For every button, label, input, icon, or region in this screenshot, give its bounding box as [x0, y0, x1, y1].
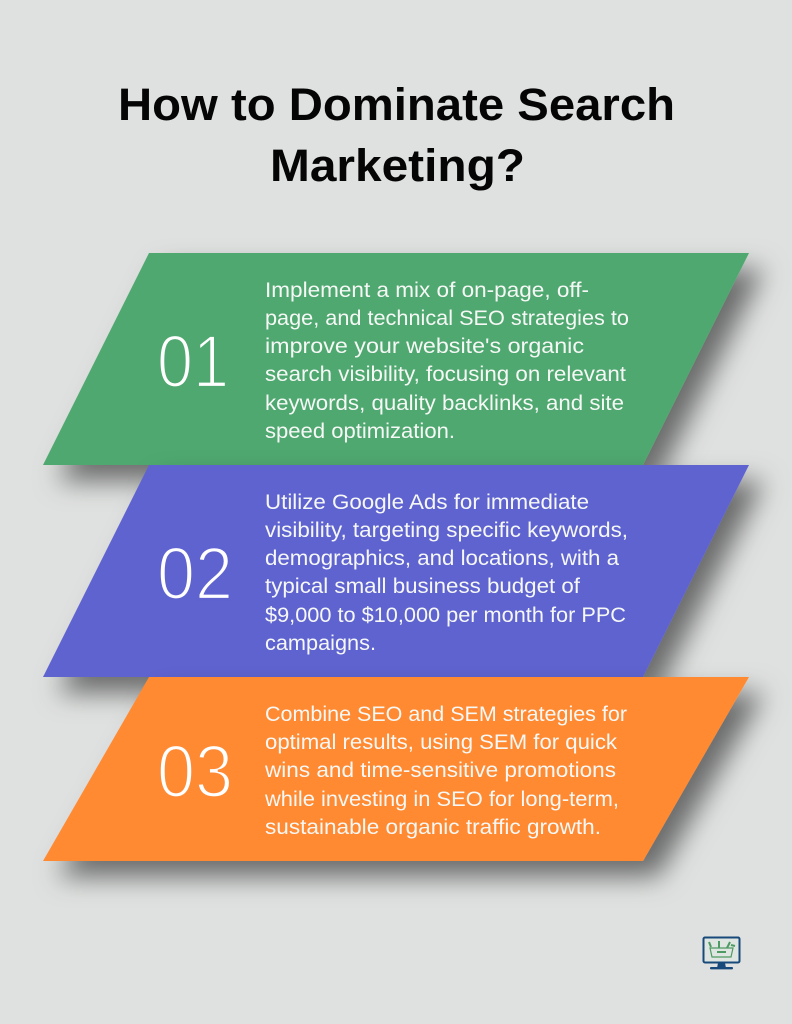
parallelogram: green — [43, 253, 749, 465]
text: step 01 description: Implement a mix of on-page, off- — [265, 279, 589, 302]
text: step 01 description: search visibility, focusing on relevant — [265, 363, 626, 386]
text: step 02 description: $9,000 to $10,000 per month for PPC — [265, 604, 626, 627]
text: step 03 description: optimal results, using SEM for quick — [265, 731, 618, 754]
text: step 02 description: demographics, and locations, with a — [265, 547, 619, 570]
title: Marketing? — [270, 140, 525, 191]
panel: step 01 — [43, 253, 749, 465]
text: step 01 description: page, and technical SEO strategies to — [265, 307, 629, 330]
icon: monitor with toolbox — [704, 938, 740, 969]
text: step 02 description: Utilize Google Ads for immediate — [265, 491, 589, 514]
text: step 03 description: Combine SEO and SEM strategies for — [265, 703, 627, 726]
text: step 01 description: speed optimization. — [265, 420, 455, 443]
parallelogram: blue — [43, 465, 749, 677]
text: step 03 description: sustainable organic traffic growth. — [265, 816, 601, 839]
title: How to Dominate Search — [118, 79, 675, 130]
text: step 01 description: improve your website's organic — [265, 335, 584, 358]
number: 01: 01 — [157, 320, 229, 403]
text: step 02 description: campaigns. — [265, 632, 376, 655]
parallelogram: orange — [43, 677, 749, 861]
text: step 02 description: typical small business budget of — [265, 575, 580, 598]
panel: step 03 — [43, 677, 749, 861]
text: step 03 description: wins and time-sensitive promotions — [264, 759, 616, 782]
panel: step 02 — [43, 465, 749, 677]
number: 02: 02 — [157, 532, 233, 615]
text: step 02 description: visibility, targeting specific keywords, — [265, 519, 628, 542]
text: step 03 description: while investing in SEO for long-term, — [264, 788, 619, 811]
text: step 02 description — [265, 491, 628, 655]
text: step 01 description: keywords, quality backlinks, and site — [265, 392, 624, 415]
text: step 01 description — [265, 279, 629, 443]
title — [118, 79, 675, 191]
number: 03: 03 — [157, 730, 233, 813]
text: step 03 description — [264, 703, 627, 839]
